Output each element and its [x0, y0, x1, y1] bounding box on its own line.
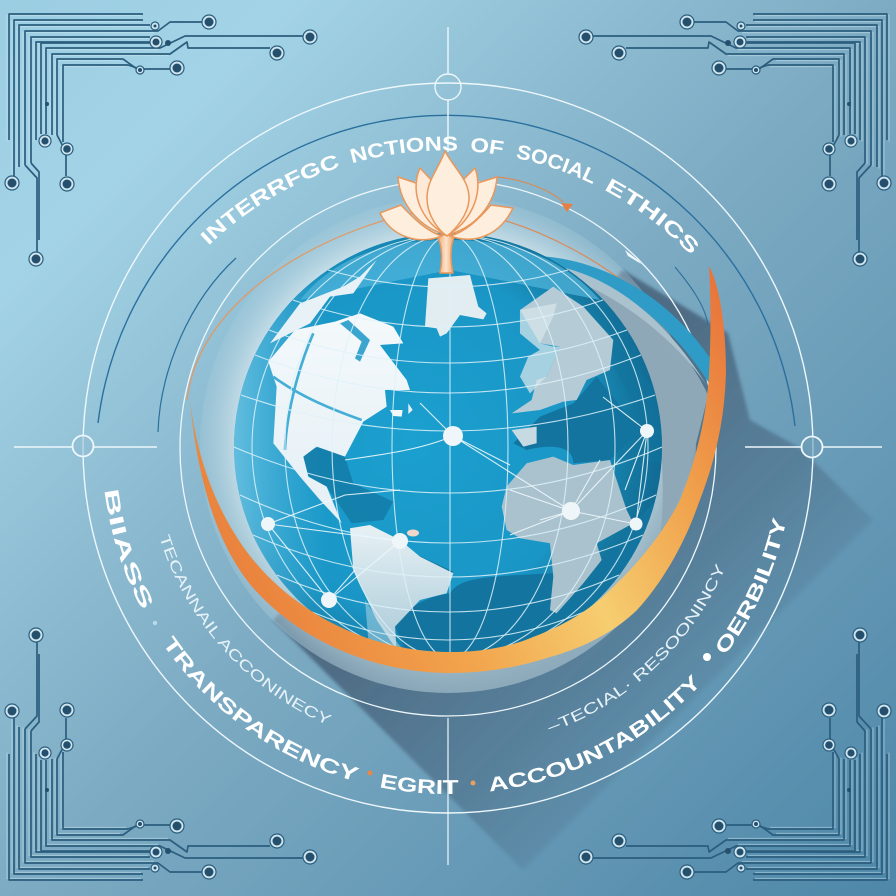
- greenland: [425, 275, 487, 337]
- network links: [268, 397, 647, 600]
- ocean sphere: [234, 233, 662, 661]
- stem: [437, 235, 455, 273]
- left rim light: [234, 284, 312, 611]
- thin orange arc right: [470, 212, 650, 305]
- parallels: [234, 270, 662, 640]
- translucent halo glow: [200, 197, 696, 693]
- short dark arc left: [158, 258, 236, 432]
- blue ribbon behind globe: [530, 256, 710, 385]
- dark blue arc upper outer: [98, 115, 795, 426]
- outer left petal: [398, 177, 447, 235]
- grey glass band right of globe: [560, 262, 708, 540]
- keyword separator dots: [153, 621, 711, 786]
- meridians: [252, 235, 648, 660]
- halo lower shading: [200, 197, 696, 693]
- outer right petal: [447, 177, 497, 235]
- outer white ring: [83, 83, 813, 813]
- centre petal: [427, 151, 469, 236]
- title curved text: NCTIONS: [350, 136, 457, 163]
- circuit traces: top-left corner: [5, 14, 317, 266]
- title curved text: ETHICS: [606, 178, 698, 252]
- outer curved keywords: EGRIT: [380, 774, 458, 794]
- globe: [234, 233, 663, 661]
- mid left petal: [416, 168, 447, 235]
- title curved text: INTERRFGC: [200, 156, 338, 244]
- title curved text: SOCIAL: [516, 146, 594, 184]
- glass sheen lower: [365, 600, 401, 648]
- network nodes: [261, 424, 654, 608]
- inner curved captions: [161, 534, 723, 730]
- lotus flower and stem: [380, 151, 513, 273]
- circuit traces: bottom-right corner: [579, 628, 891, 880]
- thin orange arc left: [187, 208, 440, 400]
- crosshair bottom: [447, 718, 449, 865]
- outer curved keywords: [104, 490, 785, 794]
- top cap lighter water: [300, 240, 600, 300]
- south america: [350, 525, 453, 650]
- mid right petal: [447, 168, 478, 235]
- title curved text: OF: [472, 138, 504, 154]
- north america: [268, 260, 413, 523]
- short dark arc right: [675, 267, 708, 325]
- inner curved captions: TECANNAIL ACCONINECY: [161, 534, 332, 723]
- circuit traces: top-right corner: [579, 14, 891, 266]
- outer curved keywords: TRANSPARENCY: [166, 635, 360, 780]
- lower left petal: [380, 205, 442, 240]
- darker shelf seas: [303, 317, 663, 653]
- continents and grid clipped to sphere: [234, 233, 663, 661]
- outer curved keywords: BIIASS: [104, 490, 152, 608]
- crosshair top: [435, 27, 461, 152]
- lower right petal: [450, 205, 513, 239]
- thin orange connector and marker: [498, 177, 573, 212]
- long diagonal globe shadow: [273, 270, 873, 870]
- outer curved keywords: ACCOUNTABILITY: [490, 674, 697, 792]
- pale ribbon interior: [565, 268, 707, 386]
- outer curved keywords: OERBILITY: [717, 517, 785, 652]
- inner white ring: [180, 180, 716, 716]
- white tapered accent on inner ring: [625, 250, 641, 264]
- small pink island: [407, 530, 419, 536]
- circuit traces: bottom-left corner: [5, 628, 317, 880]
- eurasia: [512, 287, 613, 447]
- title curved text: [200, 136, 698, 252]
- inner curved captions: –TECIAL· RESOONINCY: [548, 563, 723, 730]
- africa: [502, 457, 633, 613]
- crosshair left: [14, 436, 157, 456]
- crosshair right: [745, 436, 882, 458]
- thick orange and gold swoosh: [190, 266, 726, 673]
